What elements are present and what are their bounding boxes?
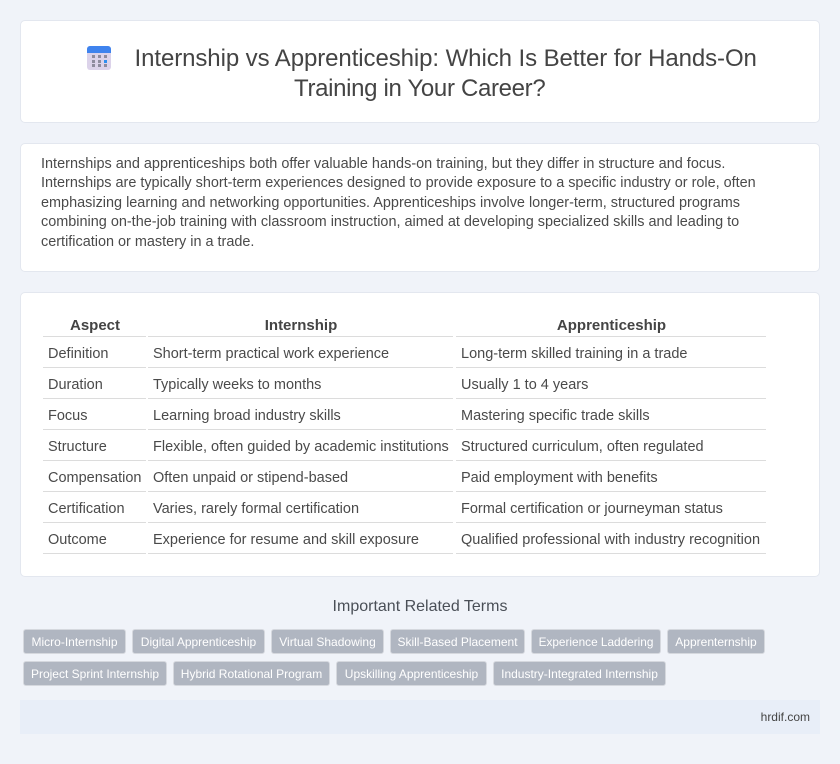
related term tags: Digital Apprenticeship	[141, 635, 256, 649]
intro text: emphasizing learning and networking opportunities. Apprenticeships involve longer-term, structured programs	[41, 195, 740, 211]
comparison table: Often unpaid or stipend-based	[153, 470, 348, 486]
comparison table: Formal certification or journeyman status	[461, 501, 723, 517]
related term tags: Apprenternship	[675, 635, 757, 649]
comparison table: Structured curriculum, often regulated	[461, 439, 704, 455]
comparison table: Typically weeks to months	[153, 377, 321, 393]
intro panel	[20, 143, 820, 272]
comparison table: Flexible, often guided by academic institutions	[153, 439, 449, 455]
intro text: combining on-the-job training with classroom instruction, aimed at developing specialized skills and leading to	[41, 214, 739, 230]
related term tags	[23, 629, 765, 686]
related term tags: Skill-Based Placement	[397, 635, 518, 649]
comparison table: Learning broad industry skills	[153, 408, 341, 424]
intro text: Internships are typically short-term experiences designed to provide exposure to a specific industry or role, often	[41, 175, 756, 191]
related term tags: Project Sprint Internship	[31, 667, 159, 681]
comparison table: Outcome	[48, 532, 107, 548]
comparison table: Structure	[48, 439, 107, 455]
footer source: hrdif.com	[761, 710, 810, 724]
icon: calendar	[87, 46, 111, 70]
title card	[20, 20, 820, 123]
comparison table: Focus	[48, 408, 88, 424]
footer bar	[20, 700, 820, 734]
related term tags: Upskilling Apprenticeship	[345, 667, 478, 681]
related term tags: Micro-Internship	[31, 635, 118, 649]
comparison table: Mastering specific trade skills	[461, 408, 650, 424]
comparison table: Long-term skilled training in a trade	[461, 346, 687, 362]
comparison table: Duration	[48, 377, 103, 393]
comparison table: Paid employment with benefits	[461, 470, 658, 486]
comparison table: Certification	[48, 501, 125, 517]
comparison table: Experience for resume and skill exposure	[153, 532, 419, 548]
related term tags: Hybrid Rotational Program	[181, 667, 322, 681]
comparison table: Definition	[48, 346, 108, 362]
comparison table panel	[20, 292, 820, 577]
comparison table	[43, 317, 766, 554]
comparison table: Usually 1 to 4 years	[461, 377, 588, 393]
comparison table: Short-term practical work experience	[153, 346, 389, 362]
intro text: Internships and apprenticeships both offer valuable hands-on training, but they differ in structure and focus.	[41, 156, 725, 172]
intro text: certification or mastery in a trade.	[41, 234, 254, 250]
related term tags: Virtual Shadowing	[279, 635, 376, 649]
comparison table: Apprenticeship	[557, 317, 666, 334]
related term tags: Industry-Integrated Internship	[501, 667, 658, 681]
title	[134, 45, 757, 102]
comparison table: Internship	[265, 317, 337, 334]
intro text	[41, 156, 756, 250]
title: Training in Your Career?	[294, 75, 545, 102]
related terms heading: Important Related Terms	[333, 598, 507, 615]
comparison table: Aspect	[70, 317, 120, 334]
comparison table: Varies, rarely formal certification	[153, 501, 359, 517]
comparison table: Qualified professional with industry recognition	[461, 532, 760, 548]
related term tags: Experience Laddering	[539, 635, 653, 649]
title: Internship vs Apprenticeship: Which Is Better for Hands-On	[134, 45, 757, 72]
comparison table: Compensation	[48, 470, 142, 486]
